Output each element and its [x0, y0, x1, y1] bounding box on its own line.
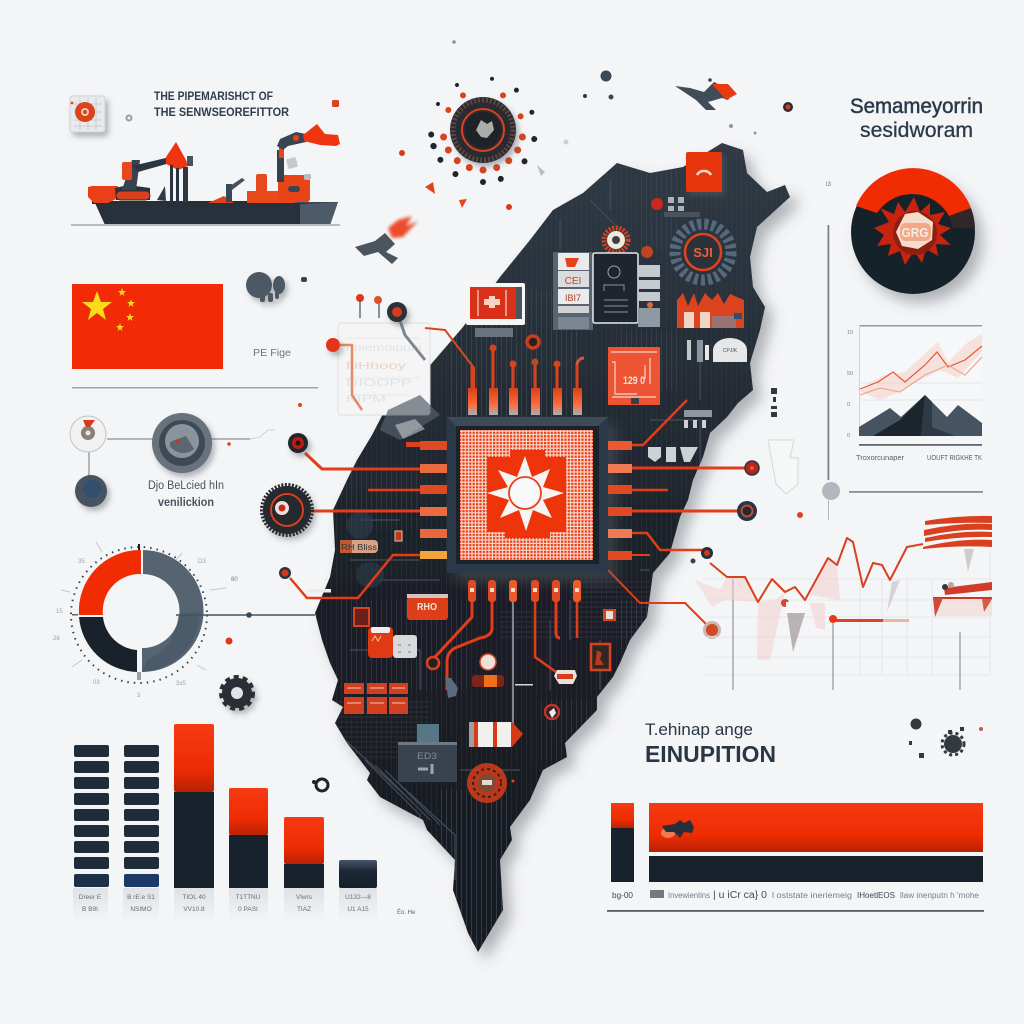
starburst: GRG: [902, 225, 928, 240]
bar labels: U1 A15: [347, 906, 369, 913]
white small parts: [687, 338, 747, 362]
red node and small parts: [651, 197, 700, 217]
bar labels: T1TTNU: [236, 894, 261, 901]
tick labels: 28: [53, 636, 60, 642]
label: lens network: Djo BeLcied hIn: [148, 480, 224, 492]
centre small arm: [208, 196, 234, 203]
bar labels: B rE:e S1: [127, 894, 155, 901]
line and mountain chart: 50: [847, 371, 853, 377]
bar labels: TIOL 40: [182, 894, 206, 901]
heading right: Semameyorrin: [850, 95, 983, 118]
title: top left: THE PIPEMARISHCT OF: [154, 89, 273, 103]
faint keypad outline: fiiHhooy: [346, 361, 406, 372]
red outline box: [354, 608, 369, 626]
ring end and clamp: [427, 657, 458, 698]
grid chart right with red line: [695, 516, 992, 690]
icon: small lens: [75, 475, 107, 507]
wavy striped flag: [923, 516, 992, 549]
faint keypad outline: DIOOPP: [346, 378, 413, 389]
red square with icon: [686, 152, 722, 192]
bottom caption: Invewientins: [668, 891, 710, 900]
map of island with circuit texture: [310, 140, 800, 960]
right frame icon: [591, 644, 610, 670]
red segment: [829, 615, 909, 623]
icon: small gear top left: [126, 116, 132, 120]
donut black: [79, 617, 137, 672]
title: top left: [154, 89, 289, 119]
panel: flag of China: [72, 284, 223, 369]
chart labels: [856, 455, 982, 462]
label: page: PE Fige: [253, 347, 291, 359]
heading bottom right: EINUPITION: [645, 741, 776, 767]
donut chart left: [53, 542, 315, 699]
tick labels: [53, 559, 238, 699]
dark profile screen: [593, 253, 638, 323]
red blocks group: [677, 293, 744, 328]
icon: small red cube: [332, 100, 339, 107]
line and mountain chart: 0: [847, 402, 850, 408]
bottom caption: l oststate ineriemeig: [772, 891, 852, 900]
line and mountain chart: [847, 325, 982, 462]
machinery on ship: [71, 124, 340, 226]
button and pill: [472, 654, 504, 687]
chart labels: UOUFT RIGKHE TK: [927, 455, 982, 462]
faint keypad outline: oniemoipuni: [346, 343, 422, 354]
heading bottom right: [645, 720, 776, 767]
bar labels: U132—8: [345, 894, 371, 901]
donut gray: [142, 550, 204, 672]
heading right: [850, 95, 983, 142]
dark device box: [398, 724, 457, 782]
small bits near blob: [301, 277, 307, 282]
small trend block: [933, 582, 992, 617]
bar labels: TIAZ: [297, 906, 311, 913]
bar labels: B B9I: [82, 906, 98, 913]
lens network: [70, 413, 275, 507]
faint keypad outline: [338, 323, 430, 415]
icon: gray creature blob: [246, 272, 285, 302]
heading right: sesidworam: [860, 119, 973, 142]
components upper map: [466, 152, 777, 462]
bar chart: Éo. He: [397, 909, 416, 916]
circuit end nodes: [262, 403, 803, 639]
white small parts: CPJIK: [723, 348, 738, 354]
tick labels: 15: [56, 609, 63, 615]
bottom caption: | u iCr ca} 0: [713, 890, 767, 901]
icon: gear lower left: [221, 677, 253, 709]
icon: gun-like tool with flame: [355, 216, 418, 264]
donut red: [79, 550, 141, 615]
red data panel: [608, 347, 660, 405]
title: top left: THE SENWSEOREFITTOR: [154, 105, 289, 119]
flag stars: [82, 288, 135, 331]
chart fills: [695, 558, 992, 660]
bottom caption: llaw inenputn h 'mohe: [900, 891, 980, 900]
icon: sketch outline right of map: [768, 440, 798, 494]
left chip pins: [395, 441, 447, 559]
bar labels: Vlwrs: [296, 894, 313, 901]
tick labels: 3: [137, 693, 141, 699]
white list panel: [553, 252, 593, 330]
ring small: [545, 705, 559, 719]
white list panel: IBI7: [565, 293, 581, 303]
icon: compass dial: [70, 416, 106, 452]
red chip grid: [344, 683, 408, 714]
monitor: [466, 283, 525, 337]
bar labels: [73, 888, 377, 924]
line and mountain chart: 0: [847, 433, 850, 439]
red eye gear: [604, 228, 628, 252]
small red-white connector: [554, 670, 577, 684]
red spiked gear left: [262, 485, 312, 535]
icon: plane top: [675, 78, 737, 110]
capsule: [469, 722, 523, 747]
bar labels: VV10.8: [183, 906, 205, 913]
tick labels: 35: [78, 559, 85, 565]
line and mountain chart: 10: [847, 330, 853, 336]
big spiky gear: SJI: [693, 245, 713, 260]
gray stack: [638, 265, 660, 327]
bar labels: NSIMO: [130, 906, 152, 913]
bar chart: [73, 724, 416, 924]
dark marks right of map: [771, 388, 777, 417]
divider under flag: [72, 387, 318, 388]
icon: keypad target: [70, 96, 105, 132]
left excavator: [88, 186, 118, 203]
stacked chip column one: [74, 745, 109, 887]
cluster of dark gears: [909, 718, 983, 758]
bar labels: Dreer E: [79, 894, 102, 901]
right excavator: [247, 191, 295, 203]
stacked chip column two: [124, 745, 159, 887]
circuit traces around chip: [290, 400, 752, 725]
red bug emblem: [467, 763, 507, 803]
tick labels: 03: [93, 680, 100, 686]
label strip: [340, 540, 378, 553]
icon: dark splat on red bar: [661, 820, 694, 838]
bottom chip pins: [468, 580, 581, 602]
bottom caption: bg-00: [612, 891, 634, 900]
mountains: [859, 395, 982, 436]
label: lens network: venilickion: [158, 497, 214, 509]
white icons right of chip: [648, 410, 712, 462]
big spiky gear: [675, 224, 731, 280]
dark device box: ED3: [417, 751, 437, 761]
ring: [527, 336, 539, 348]
label: lens network: [148, 480, 224, 509]
small label: t3: [826, 182, 832, 188]
bar panel bottom right: [607, 803, 984, 912]
components lower map: [307, 540, 616, 803]
icon: big lens: [152, 413, 212, 473]
chip sun emblem: [487, 456, 564, 531]
tick labels: D3: [198, 559, 206, 565]
icon: dark small gear: [312, 779, 328, 791]
faint keypad outline: KIPM: [346, 394, 386, 405]
hull: [95, 202, 338, 225]
tick labels: 80: [231, 577, 238, 583]
sunburst badge top centre: [399, 40, 793, 210]
heading bottom right: T.ehinap ange: [645, 720, 753, 739]
battery pair: [368, 627, 417, 658]
bar labels: 0 PASI: [238, 906, 258, 913]
red trend line: [710, 538, 923, 602]
axis line right: [822, 225, 983, 520]
right chip pins: [608, 441, 632, 560]
red RHO box: [407, 594, 448, 620]
red RHO box: RHO: [417, 602, 437, 613]
red data panel: 129 0: [623, 375, 645, 387]
label strip: RH Bliss: [341, 543, 377, 552]
white list panel: CEI: [565, 276, 581, 287]
upper-left circuit nodes: [326, 294, 474, 440]
tick labels: 3x5: [176, 681, 186, 687]
bottom caption: IHoetlEOS: [857, 891, 895, 900]
top chip pins: [468, 344, 584, 415]
central chip: [447, 417, 608, 573]
bottom caption: [612, 890, 980, 901]
chart labels: Troxorcunaper: [856, 455, 905, 462]
donut badge right: [851, 168, 975, 294]
